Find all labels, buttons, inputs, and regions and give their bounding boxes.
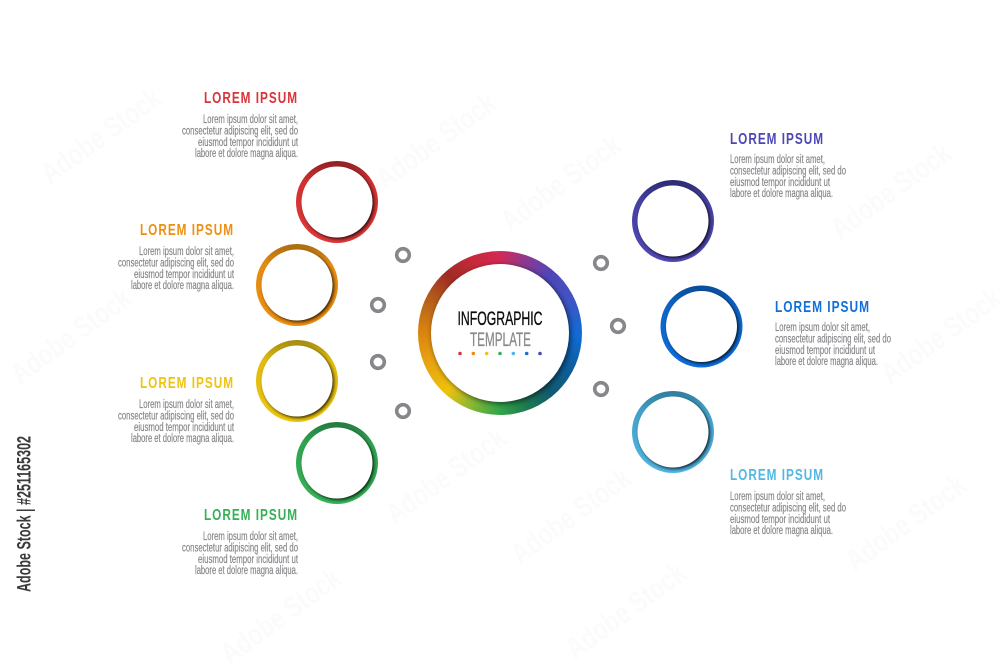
text block: red: LOREM IPSUM [204,90,298,107]
center title [458,308,542,351]
text block: blue: Lorem ipsum dolor sit amet, [775,322,870,334]
watermark pattern: Adobe Stock [5,282,138,391]
text block: light blue [730,467,846,537]
text block: blue: LOREM IPSUM [775,299,870,316]
text block: green: eiusmod tempor incididunt ut [198,554,299,566]
text block: light blue: labore et dolore magna aliqua. [730,525,833,537]
text block: blue: labore et dolore magna aliqua. [775,356,878,368]
watermark pattern: Adobe Stock [35,82,168,191]
text block: red: consectetur adipiscing elit, sed do [182,126,298,138]
text block: green: consectetur adipiscing elit, sed do [182,542,298,554]
text block: red: Lorem ipsum dolor sit amet, [203,114,298,126]
text block: orange: labore et dolore magna aliqua. [131,280,234,292]
watermark pattern: Adobe Stock [505,462,638,571]
central gradient ring [418,251,582,415]
text block: green [182,507,299,577]
text block: yellow: consectetur adipiscing elit, sed do [118,410,234,422]
text block: red [182,90,299,160]
text block: purple [730,131,846,200]
text block: blue [775,299,891,368]
watermark pattern: Adobe Stock [825,137,958,246]
text block: purple: consectetur adipiscing elit, sed do [730,166,846,178]
text block: light blue: LOREM IPSUM [730,467,824,484]
center title: TEMPLATE [470,329,531,351]
text block: yellow: eiusmod tempor incididunt ut [134,422,235,434]
text block: orange: LOREM IPSUM [140,222,234,239]
text block: orange [118,222,235,292]
text block: purple: LOREM IPSUM [730,131,824,148]
ring: red [296,161,378,243]
ring: light blue [632,391,714,473]
text block: yellow: Lorem ipsum dolor sit amet, [139,399,234,411]
text block: orange: consectetur adipiscing elit, sed do [118,258,234,270]
watermark pattern: Adobe Stock [560,557,693,666]
text block: blue: eiusmod tempor incididunt ut [775,345,876,357]
text block: red: labore et dolore magna aliqua. [195,148,298,160]
text block: green: LOREM IPSUM [204,507,298,524]
watermark pattern: Adobe Stock [370,87,503,196]
text block: light blue: consectetur adipiscing elit, sed do [730,502,846,514]
text block: purple: Lorem ipsum dolor sit amet, [730,154,825,166]
text block: yellow: labore et dolore magna aliqua. [131,433,234,445]
text block: green: labore et dolore magna aliqua. [195,565,298,577]
connector dots [372,249,624,417]
text block: orange: eiusmod tempor incididunt ut [134,269,235,281]
center title: INFOGRAPHIC [458,308,542,330]
text block: purple: eiusmod tempor incididunt ut [730,177,831,189]
watermark pattern: Adobe Stock [215,562,348,667]
text block: yellow [118,375,235,445]
text block: green: Lorem ipsum dolor sit amet, [203,531,298,543]
text block: yellow: LOREM IPSUM [140,375,234,392]
center colored dots [458,352,542,355]
text block: red: eiusmod tempor incididunt ut [198,137,299,149]
text block: blue: consectetur adipiscing elit, sed do [775,334,891,346]
watermark pattern: Adobe Stock [380,422,513,531]
text block: orange: Lorem ipsum dolor sit amet, [139,246,234,258]
text block: light blue: Lorem ipsum dolor sit amet, [730,491,825,503]
text block: purple: labore et dolore magna aliqua. [730,188,833,200]
ring: orange [256,244,338,326]
ring: blue [660,286,742,368]
watermark pattern: Adobe Stock [495,129,628,238]
ring: purple [632,180,714,262]
text block: light blue: eiusmod tempor incididunt ut [730,514,831,526]
ring: green [296,422,378,504]
ring: yellow [256,340,338,422]
vertical stock credit: Adobe Stock | #251165302 [14,436,36,592]
